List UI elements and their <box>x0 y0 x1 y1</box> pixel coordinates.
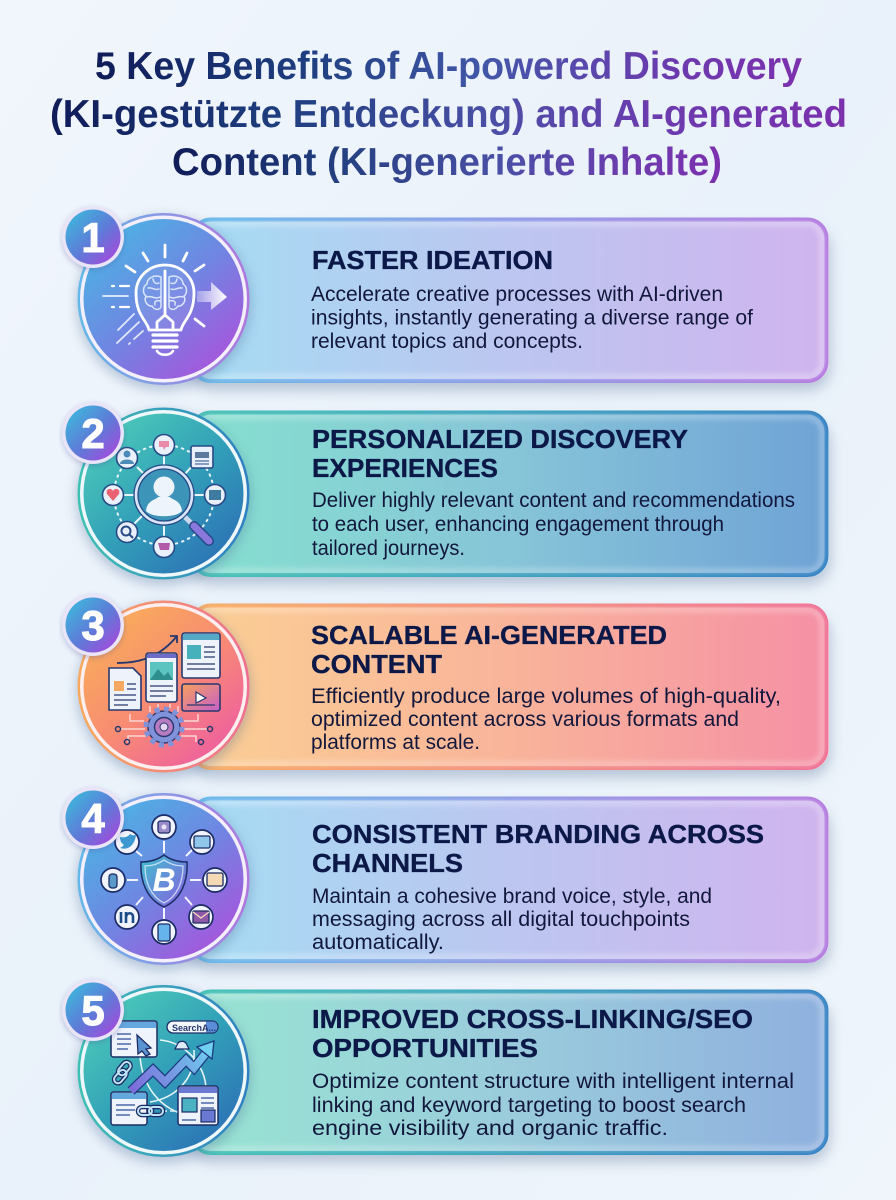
body text: optimized content across various formats and <box>311 708 739 731</box>
panel: consistent branding <box>190 797 830 970</box>
badge: number 1: 1 <box>81 214 105 261</box>
body text: Deliver highly relevant content and recommendations <box>312 489 795 512</box>
badge: number 2 <box>62 402 124 466</box>
body text <box>312 489 795 560</box>
heading <box>312 424 688 483</box>
heading: SCALABLE AI-GENERATED <box>311 620 667 650</box>
body text: tailored journeys. <box>312 537 465 560</box>
heading: CONTENT <box>311 649 442 679</box>
badge: number 4 <box>62 787 124 851</box>
body text: relevant topics and concepts. <box>311 330 583 353</box>
panel: personalized discovery <box>190 411 830 584</box>
title <box>50 45 847 184</box>
heading: IMPROVED CROSS-LINKING/SEO <box>312 1004 753 1034</box>
panel: cross-linking <box>190 990 830 1162</box>
heading <box>312 1004 753 1063</box>
body text: Optimize content structure with intelligent internal <box>312 1070 794 1093</box>
body text <box>311 685 781 754</box>
body text: linking and keyword targeting to boost search <box>312 1094 746 1117</box>
heading: PERSONALIZED DISCOVERY <box>312 424 688 454</box>
body text <box>312 1070 794 1140</box>
panel: scalable content <box>190 604 830 777</box>
badge: number 3 <box>62 594 124 658</box>
badge: number 1 <box>62 206 124 270</box>
body text <box>311 283 753 353</box>
icon: SEO windows, links and growth arrow <box>76 985 250 1163</box>
body text: messaging across all digital touchpoints <box>312 908 690 931</box>
body text: to each user, enhancing engagement through <box>312 513 724 536</box>
heading: EXPERIENCES <box>312 453 498 483</box>
body text: Efficiently produce large volumes of high-quality, <box>311 685 781 708</box>
heading: CONSISTENT BRANDING ACROSS <box>312 819 764 849</box>
heading <box>312 819 764 878</box>
body text: engine visibility and organic traffic. <box>312 1117 668 1140</box>
title: 5 Key Benefits of AI-powered Discovery <box>95 45 802 88</box>
heading <box>311 620 667 679</box>
badge: number 4: 4 <box>81 795 105 842</box>
panel: faster ideation <box>190 218 830 390</box>
body text: Maintain a cohesive brand voice, style, and <box>312 885 712 908</box>
badge: number 5 <box>62 979 124 1043</box>
icon: content documents and gear <box>76 600 250 778</box>
heading: CHANNELS <box>312 848 463 878</box>
body text: automatically. <box>312 931 444 954</box>
badge: number 2: 2 <box>81 410 105 457</box>
body text: insights, instantly generating a diverse range of <box>311 306 753 330</box>
badge: number 3: 3 <box>81 602 105 649</box>
title: (KI-gestützte Entdeckung) and AI-generated <box>50 93 847 136</box>
body text <box>312 885 712 954</box>
body text: platforms at scale. <box>311 731 480 754</box>
heading: OPPORTUNITIES <box>312 1033 538 1063</box>
body text: Accelerate creative processes with AI-driven <box>311 283 723 306</box>
title: Content (KI-generierte Inhalte) <box>172 141 722 184</box>
icon: magnifier with user and satellites <box>76 408 250 585</box>
icon: brand shield with channels <box>76 793 250 970</box>
icon: SEO windows, links and growth arrow: SearchA... <box>172 1023 216 1033</box>
heading: FASTER IDEATION <box>312 245 553 275</box>
icon: brand shield with channels: B <box>152 862 176 898</box>
badge: number 5: 5 <box>81 987 105 1034</box>
icon: lightbulb with brain <box>76 213 250 390</box>
